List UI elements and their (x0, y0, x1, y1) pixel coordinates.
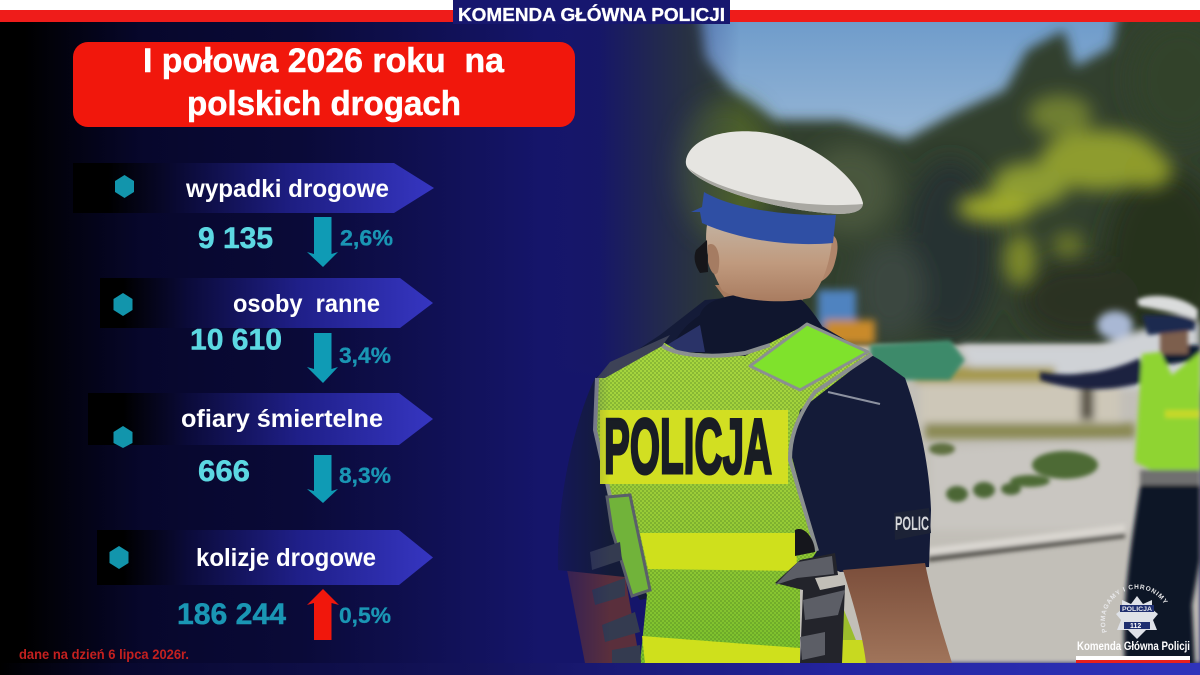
left vest pocket (607, 495, 650, 596)
red strip left (0, 10, 453, 22)
motto on arc: POMAGAMY I CHRONIMY (1100, 584, 1168, 633)
panel: osoby ranne (100, 278, 433, 383)
banner (97, 530, 433, 585)
bottom band (0, 663, 1200, 675)
ear (820, 235, 838, 282)
sleeve crease (828, 392, 880, 404)
left arm (567, 570, 640, 663)
sleeve band (930, 525, 931, 534)
logo: Komenda Główna Policji (1076, 584, 1190, 663)
road (780, 345, 1200, 663)
sleeve label: POLIC (895, 514, 929, 535)
value: 186 244 (177, 598, 286, 631)
ear left (708, 244, 719, 274)
label: osoby ranne (233, 290, 380, 318)
left fade over officer (558, 378, 606, 663)
value: 9 135 (198, 222, 273, 255)
shrubs, kerb and road sign (870, 340, 1125, 562)
label: ofiary śmiertelne (181, 405, 383, 433)
cap band (691, 192, 836, 244)
icon: hexagon (115, 175, 134, 198)
title background (73, 42, 575, 127)
photo: police officers at a roadside (540, 0, 1200, 665)
icon: hexagon (110, 546, 128, 569)
panel: kolizje drogowe (97, 530, 433, 640)
source note: dane na dzień 6 lipca 2026r. (19, 647, 189, 662)
change: 3,4% (339, 343, 391, 368)
icon: hexagon (114, 293, 132, 316)
cap rim (687, 167, 863, 214)
title (73, 42, 575, 127)
header text: KOMENDA GŁÓWNA POLICJI (458, 4, 725, 25)
main officer (558, 131, 952, 663)
value: 666 (198, 455, 250, 488)
arm (843, 563, 952, 663)
arrow down (307, 455, 338, 503)
red strip right (730, 10, 1200, 22)
icon: police star (1116, 596, 1158, 639)
label: wypadki drogowe (185, 175, 389, 203)
panel: ofiary śmiertelne (88, 393, 433, 503)
banner (73, 163, 434, 213)
change: 8,3% (339, 463, 391, 488)
vest side panel (842, 640, 866, 663)
banner (100, 278, 433, 328)
title line 1: I połowa 2026 roku na (143, 42, 505, 80)
dark hip holster (795, 529, 815, 556)
neck (715, 285, 803, 300)
shoulder strap (597, 335, 670, 378)
reflective stripe lower (642, 636, 800, 663)
label: kolizje drogowe (196, 544, 376, 572)
icon: police star: POLICJA (1122, 607, 1153, 613)
fade into navy (543, 22, 732, 376)
change: 0,5% (339, 603, 391, 628)
banner (88, 393, 433, 445)
top bar (0, 0, 1200, 25)
arrow down (307, 217, 338, 267)
photo background: sky, trees and road (611, 22, 1200, 663)
value: 10 610 (190, 324, 282, 356)
change: 2,6% (340, 226, 393, 250)
vest right lower side (842, 610, 856, 640)
head (706, 225, 832, 301)
left straps (590, 542, 641, 663)
second officer in the background (1040, 296, 1200, 665)
collar (676, 295, 822, 356)
icon: police star: 112 (1130, 623, 1141, 630)
arrow up (307, 589, 339, 640)
header tab (453, 0, 730, 24)
icon: hexagon (114, 426, 132, 448)
uniform shirt (558, 292, 931, 600)
reflective POLICJA band (600, 410, 788, 484)
arrow down (307, 333, 338, 383)
logo flag stripe (1076, 656, 1190, 663)
panel: wypadki drogowe (73, 163, 434, 267)
tree canopy (600, 22, 1200, 360)
reflective stripe (640, 533, 797, 571)
shoulder patch (750, 324, 868, 390)
title line 2: polskich drogach (187, 85, 461, 123)
white strip (0, 0, 1200, 10)
right straps (775, 553, 845, 663)
cap top (686, 131, 863, 214)
vest trim (595, 345, 872, 551)
vest (595, 324, 872, 663)
main officer: POLICJA (604, 402, 772, 490)
sunglasses (695, 240, 708, 273)
shoulder light patch (667, 325, 705, 352)
